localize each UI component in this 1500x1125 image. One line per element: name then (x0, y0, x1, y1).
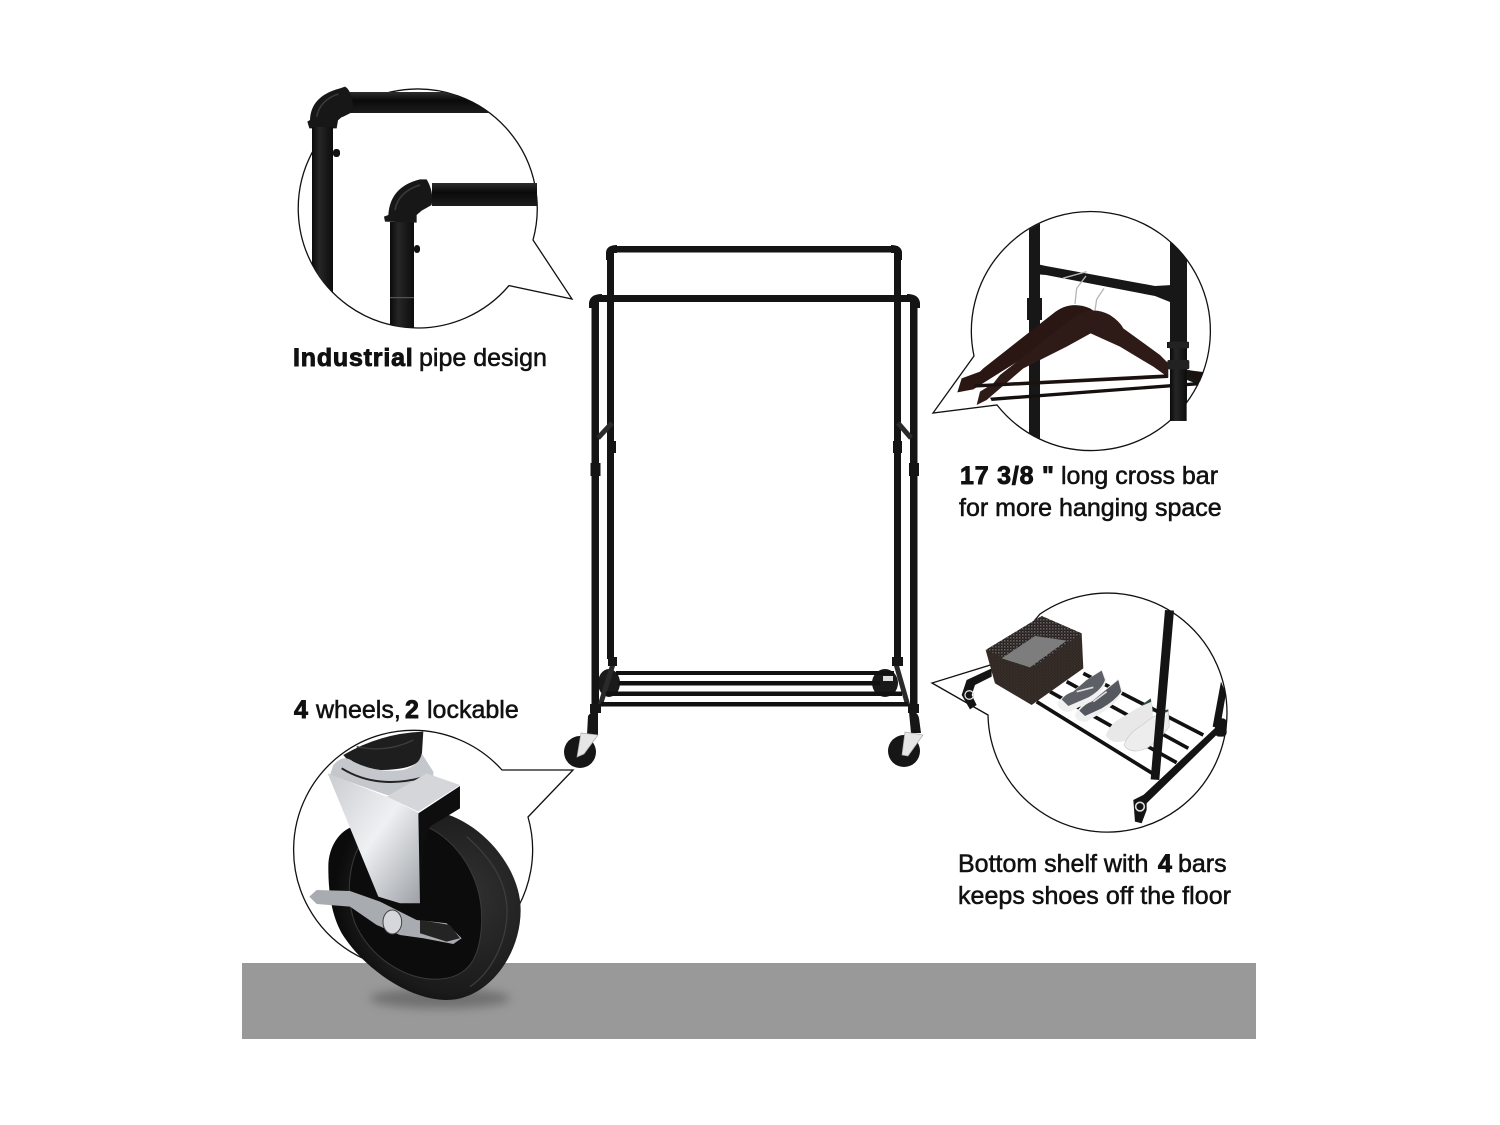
caption: 17 3/8 " (960, 462, 1055, 490)
swivel ring (330, 753, 433, 797)
side rail, poles and caster (962, 668, 1227, 823)
detail callout: cross bar with hangers (933, 212, 1222, 522)
detail callout: caster wheel (242, 696, 1256, 1039)
joints (587, 657, 921, 735)
front frame (589, 294, 920, 712)
detail callout: pipe elbows (293, 87, 572, 372)
axle pin (383, 910, 402, 934)
bottom shelf bars (601, 671, 908, 706)
front right caster (888, 732, 923, 767)
caption: wheels, (315, 696, 401, 724)
lower elbow (384, 179, 432, 223)
upper horizontal outside circle (350, 92, 400, 113)
braces (598, 423, 911, 706)
basket (986, 616, 1083, 705)
uprights and cross bar (1027, 224, 1202, 438)
hub (349, 827, 482, 979)
shelf photo (962, 610, 1227, 823)
brake lever (309, 890, 462, 944)
pipe stem (343, 732, 423, 770)
callout bubble (298, 89, 572, 328)
floor shadow (370, 988, 510, 1008)
rear frame (606, 245, 902, 660)
detail callout: bottom shelf (932, 593, 1231, 910)
rear caster wheels (598, 669, 898, 697)
callout bubble (932, 593, 1227, 832)
callout bubble (294, 730, 573, 969)
caption line two: for more hanging space (959, 494, 1222, 522)
upper elbow (307, 87, 432, 223)
tire ridge (467, 837, 507, 987)
shelf bars (1037, 673, 1203, 775)
floor band (242, 963, 1256, 1039)
caption: pipe design (419, 344, 547, 372)
white shoes (1142, 698, 1153, 713)
caster photo (309, 732, 521, 1008)
caption: long cross bar (1061, 462, 1218, 490)
caption: 2 (405, 696, 420, 724)
caption: 4 (1158, 850, 1173, 878)
main product: clothes rack (564, 245, 923, 768)
silver bracket (328, 773, 420, 903)
caption: bars (1178, 850, 1227, 878)
tire (328, 812, 521, 1000)
pipe photo (307, 87, 545, 332)
dark bracket side (418, 786, 460, 903)
hangers (957, 272, 1203, 421)
callout bubble (933, 212, 1210, 451)
caption line two: keeps shoes off the floor (958, 882, 1231, 910)
caption: Industrial (293, 344, 414, 372)
caption: 4 (294, 696, 309, 724)
caption: lockable (427, 696, 519, 724)
grey shoes (1057, 669, 1107, 712)
front pole (1151, 610, 1174, 780)
front left caster (564, 733, 598, 768)
caption: Bottom shelf with (958, 850, 1148, 878)
